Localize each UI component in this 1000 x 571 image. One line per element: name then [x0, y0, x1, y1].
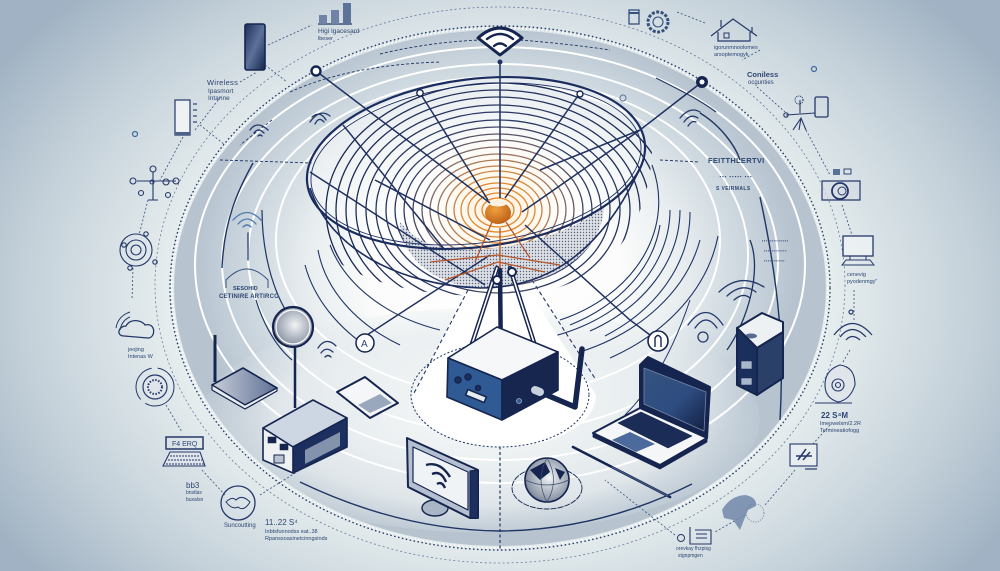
bottom number text: Inbtsfunnodss eat..38	[265, 529, 318, 535]
wireless label: Intanne	[208, 95, 230, 102]
bowl outline	[310, 168, 640, 288]
small left labels: buxalsn	[186, 497, 203, 503]
lens icon	[815, 365, 855, 403]
conless label: ocgunties	[748, 80, 774, 86]
concentric white and navy orbit arcs	[195, 40, 805, 550]
bars and title top: Hiġi Igacesard	[318, 28, 360, 35]
dish stippled underside	[400, 208, 604, 288]
outer gray ring band	[155, 7, 845, 563]
dashed base circle	[411, 343, 589, 447]
cloud icon with text: Intenas W	[128, 354, 154, 360]
calendar and gear icons	[629, 10, 668, 32]
device icon left	[175, 100, 197, 135]
monitor icon with label: cenevig	[847, 272, 866, 278]
gauge circle icon	[136, 368, 174, 406]
wireless label	[207, 78, 238, 102]
globe	[512, 458, 582, 509]
document icon with label: orevkay fhzpisg	[676, 546, 711, 552]
wireless label: Ipasmort	[208, 88, 233, 95]
dish rim	[297, 59, 655, 267]
circuit target icon	[120, 232, 157, 270]
feed horn	[485, 202, 511, 224]
router	[212, 335, 277, 409]
antenna nodes	[312, 60, 708, 101]
phone icon top left	[245, 24, 265, 70]
connector dashed lines	[132, 12, 854, 535]
bottom number text	[265, 518, 328, 542]
data labels inside band right	[708, 156, 789, 263]
wifi dome icon	[834, 310, 872, 340]
conless label	[747, 70, 778, 86]
monitor icon with label: pyodenmgy"	[847, 279, 877, 285]
small marker circles	[132, 66, 816, 136]
parabolic dish antenna	[297, 59, 702, 337]
document icon with label	[676, 527, 711, 559]
wireless label: Wireless	[207, 78, 238, 87]
scribble panel icon	[790, 444, 817, 469]
data labels inside band right: ▪▪▪▪▪▪▪▪▪▪▪▪▪▪	[762, 238, 789, 243]
number label right	[820, 411, 861, 434]
house icon with label	[711, 19, 758, 58]
base antenna pipe	[535, 349, 582, 407]
label A node	[356, 334, 374, 352]
number label right: 22 S⁴M	[821, 411, 848, 420]
cloud icon with text	[116, 312, 154, 360]
dish inner fill	[297, 59, 655, 267]
bars and title top: lbeser	[318, 36, 333, 42]
central gauge label: SESOHID	[233, 286, 258, 292]
data labels inside band right: FEITTHLERTVI	[708, 156, 765, 165]
bottom number text: Rpanssoasinetcinngsinds	[265, 536, 328, 542]
label A node: A	[361, 339, 368, 350]
data labels inside band right: S VEIRMALS	[716, 186, 751, 192]
circular icon with caption	[221, 486, 256, 529]
keyboard icon	[163, 437, 205, 466]
bottom number text: 11..22 S⁴	[265, 518, 298, 527]
laptop	[593, 357, 710, 469]
small left labels: bnstlas	[186, 490, 202, 496]
monitor icon with label	[842, 236, 877, 285]
pen	[573, 447, 670, 497]
white light beam from feed to base	[412, 285, 596, 447]
top wifi icon	[478, 28, 522, 55]
document icon with label: stgnpmgen	[678, 553, 703, 559]
globe on pole	[273, 307, 313, 408]
data labels inside band right: ▪▪▪▪▪▪▪▪▪▪▪	[764, 258, 785, 263]
lock node	[648, 331, 668, 351]
house icon with label: igorunmnoolomes	[714, 45, 758, 51]
small wifi icons in band	[233, 110, 764, 357]
base unit box	[447, 327, 558, 420]
network node icon	[130, 166, 179, 200]
gateway box	[263, 400, 347, 473]
concentric dish rings	[325, 82, 652, 296]
lower rings beyond the dish	[305, 165, 718, 358]
small left labels	[186, 481, 203, 503]
data labels inside band right: ▪▪▪▪▪▪▪▪▪▪▪▪	[764, 248, 787, 253]
dish glow	[378, 110, 618, 300]
server tower	[737, 313, 783, 395]
circular icon with caption: Suncoutting	[224, 523, 256, 529]
beam edges	[413, 280, 596, 395]
data labels inside band right: ᆞ ▪▪▪ ▪▪▪▪▪ ▪▪▪	[712, 174, 752, 179]
monitor	[407, 438, 478, 518]
number label right: Imeowelsm/2.2R	[820, 421, 861, 427]
cloud icon with text: jeojing	[127, 347, 144, 353]
central gauge label	[219, 269, 279, 300]
house icon with label: arsoptemogyk	[714, 52, 749, 58]
number label right: Termineatiofogg	[820, 428, 859, 434]
orange lower struts	[430, 222, 560, 280]
tablet	[337, 377, 398, 418]
dish ribs	[310, 62, 702, 335]
tripod mount	[470, 268, 537, 368]
small left labels: bb3	[186, 481, 200, 490]
conless label: Coniless	[747, 70, 778, 79]
central gauge label: CETINIRE ARTIRCO	[219, 294, 279, 300]
camera icon	[822, 169, 860, 200]
bars and title top	[318, 3, 360, 42]
keyboard icon: F4 ERQ	[172, 441, 198, 448]
world map icon	[722, 495, 764, 530]
smartwatch icon	[784, 96, 828, 130]
